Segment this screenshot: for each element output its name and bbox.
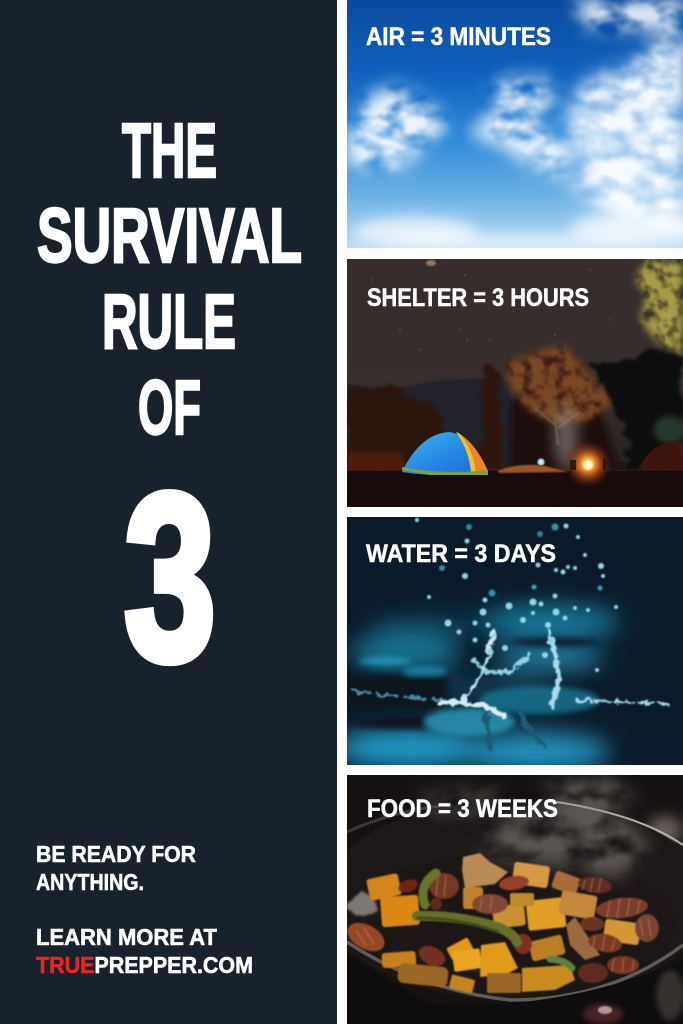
heading: the survival rule of: OF — [138, 365, 201, 451]
large number 3: 3 — [124, 445, 216, 710]
tagline: ANYTHING. — [36, 869, 144, 895]
panel: water photo — [335, 517, 683, 772]
ground — [347, 471, 683, 507]
call to action: website: TRUEPREPPER.COM — [36, 952, 253, 978]
label: food: FOOD = 3 WEEKS — [367, 795, 558, 823]
panel: shelter photo — [347, 258, 683, 507]
low haze — [353, 212, 683, 252]
squash cubes — [366, 853, 641, 994]
heading: the survival rule of: THE — [122, 108, 217, 194]
blurred water bands — [335, 605, 620, 772]
call to action: website: LEARN MORE AT — [36, 924, 218, 950]
panel: title sidebar — [0, 0, 337, 1024]
tagline: BE READY FOR — [36, 841, 196, 867]
heading: the survival rule of — [37, 108, 302, 451]
label: air: AIR = 3 MINUTES — [366, 23, 551, 51]
icon: tent — [402, 432, 488, 475]
green pepper — [417, 873, 572, 968]
food pieces — [343, 853, 659, 994]
ridge lines — [356, 876, 651, 972]
stars — [371, 269, 611, 351]
icon: wok pan — [321, 800, 683, 1024]
ridged sausage slices — [343, 873, 659, 983]
heading: the survival rule of: SURVIVAL — [37, 193, 302, 279]
steam — [420, 778, 650, 880]
campfire — [566, 442, 625, 486]
call to action: website — [36, 924, 253, 978]
splash crown — [350, 628, 668, 748]
tagline — [36, 841, 196, 895]
water droplets — [415, 518, 618, 672]
panel: food photo — [321, 775, 683, 1024]
light beam — [554, 405, 578, 469]
clouds — [347, 0, 683, 252]
trees — [347, 258, 683, 480]
panel: air photo — [347, 0, 683, 252]
label: water: WATER = 3 DAYS — [366, 540, 556, 568]
label: shelter: SHELTER = 3 HOURS — [367, 284, 589, 312]
heading: the survival rule of: RULE — [102, 279, 236, 365]
